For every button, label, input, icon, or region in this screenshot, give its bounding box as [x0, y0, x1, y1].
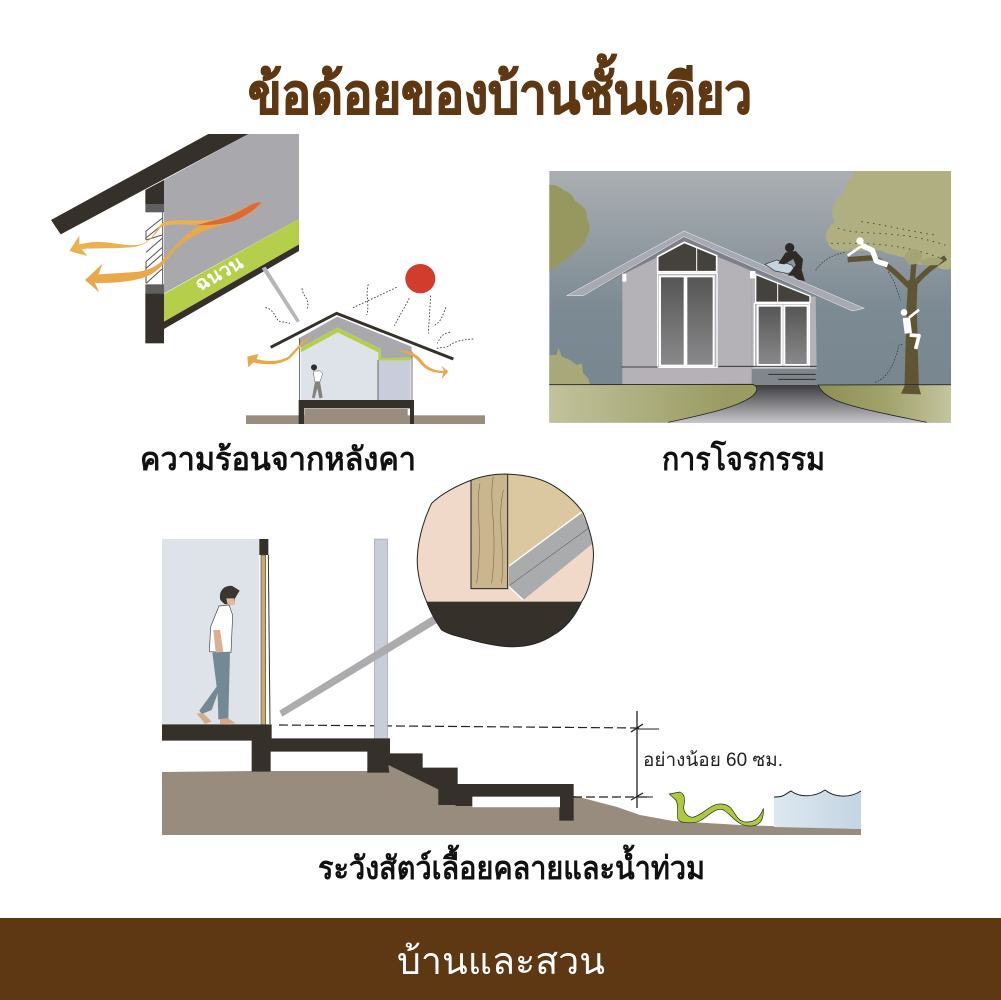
- panel: burglary scene: [549, 171, 951, 423]
- pointer to detail: [279, 616, 438, 717]
- caption: reptiles and flooding: ระวังสัตว์เลื้อยคลายและน้ำท่วม: [318, 844, 705, 886]
- roof: [583, 237, 852, 311]
- burglar climbing trunk: [901, 309, 919, 349]
- steps: [752, 369, 817, 385]
- water: [774, 790, 861, 829]
- interior wall: [162, 539, 259, 724]
- measurement: [279, 711, 783, 808]
- measurement label: อย่างน้อย 60 ซม.: [643, 750, 783, 771]
- footer brand: บ้านและสวน: [397, 941, 605, 983]
- roof detail enlargement: [51, 134, 299, 343]
- arrow: left eave airflow: [247, 337, 312, 367]
- house section: [271, 313, 453, 424]
- tree on right: [816, 171, 951, 392]
- footer bar: [0, 918, 1001, 1000]
- left tree: [549, 185, 589, 272]
- outside post: [374, 539, 388, 739]
- gable glass: [658, 242, 717, 272]
- ground slope: [162, 760, 861, 835]
- caption: roof heat: ความร้อนจากหลังคา: [140, 441, 416, 477]
- detail lens: sill flashing: [415, 470, 595, 648]
- ground: [246, 415, 485, 424]
- arrow: right eave airflow: [397, 351, 448, 379]
- hot air tip: [197, 202, 262, 225]
- pointer: roof detail: [262, 267, 300, 322]
- label: insulation: ฉนวน: [192, 252, 248, 296]
- burglar on roof: [765, 243, 805, 281]
- left bush: [549, 348, 590, 385]
- panel: flooding and reptiles section: [162, 470, 861, 835]
- lawn right: [818, 384, 951, 422]
- caption: burglary: การโจรกรรม: [662, 440, 825, 477]
- sky: [549, 171, 951, 423]
- arrow: upper heat flow: [69, 202, 262, 256]
- driveway: [668, 385, 927, 422]
- main windows: [660, 276, 685, 366]
- house: [567, 231, 864, 385]
- wall column detail: [259, 539, 270, 725]
- man walking: [197, 586, 240, 724]
- sun rays and heat lines: [265, 284, 473, 348]
- arrow: lower heat flow: [85, 202, 262, 292]
- person looking up: [311, 364, 323, 398]
- opening under lower step: [472, 797, 560, 807]
- lawn left: [549, 384, 757, 422]
- concrete floor and stairs: [162, 724, 574, 821]
- icon: sun: [405, 264, 435, 293]
- burglar in tree: [848, 237, 888, 265]
- title: ข้อด้อยของบ้านชั้นเดียว: [248, 54, 752, 125]
- panel: heat from roof: [51, 134, 485, 424]
- icon: snake: [669, 792, 763, 826]
